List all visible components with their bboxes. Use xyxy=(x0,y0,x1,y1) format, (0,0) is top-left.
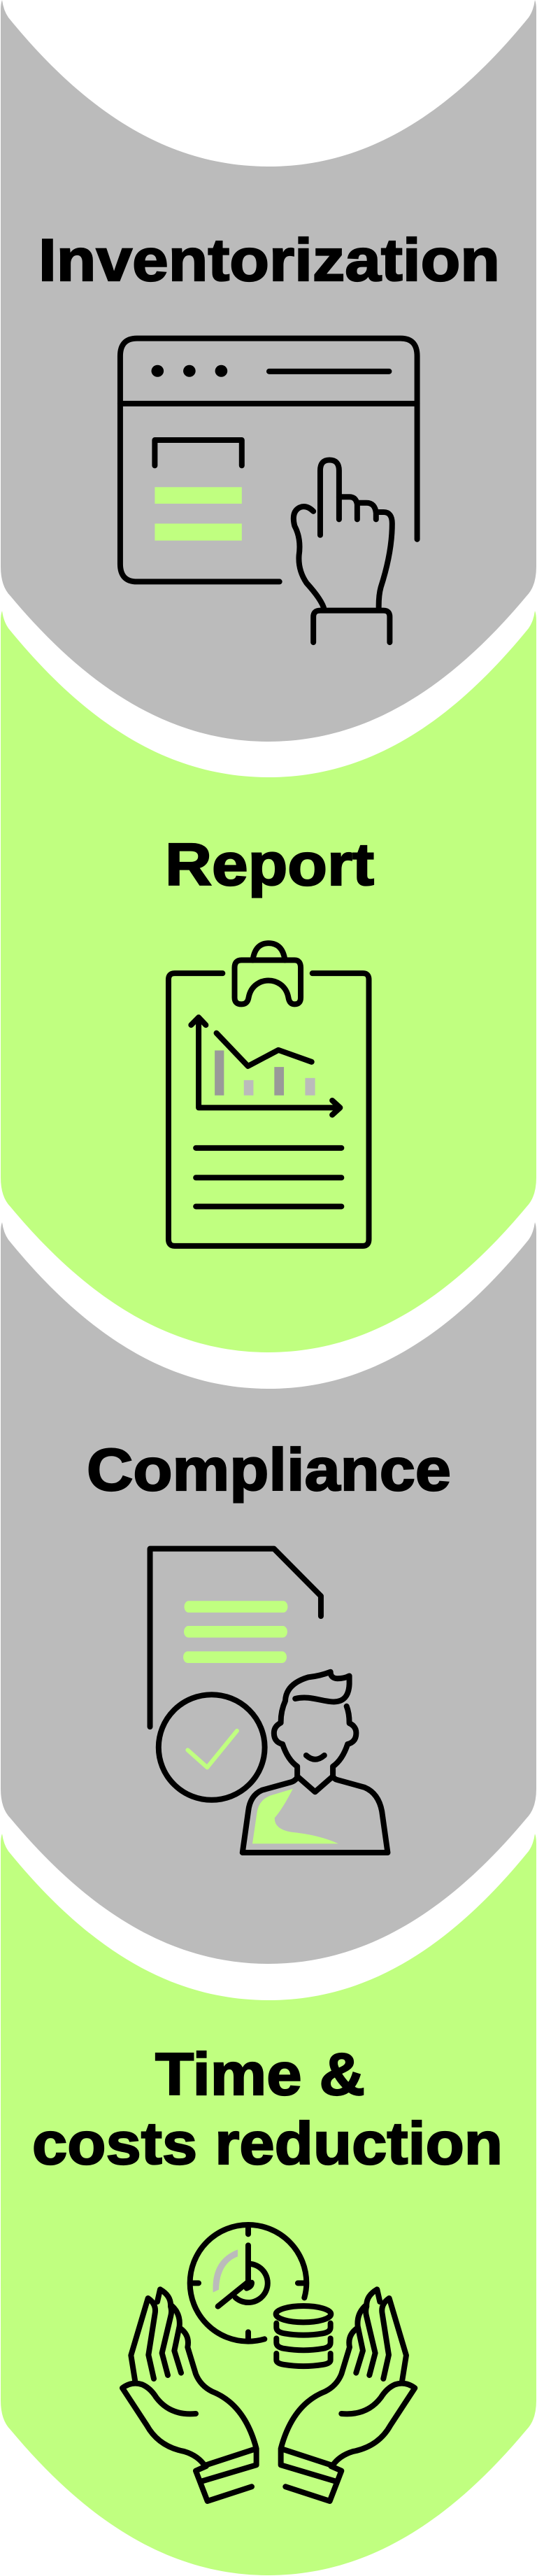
panel: report xyxy=(1,611,536,1352)
icon: browser window with pointing hand xyxy=(120,339,417,642)
heading: Compliance: Compliance xyxy=(87,1437,451,1503)
panel background: grey shield xyxy=(1,1222,536,1964)
heading: Time & costs reduction xyxy=(32,2041,503,2177)
heading: Time & costs reduction: costs reduction xyxy=(32,2111,503,2177)
icon: clipboard with chart xyxy=(169,943,369,1246)
heading: Inventorization: Inventorization xyxy=(38,227,500,294)
icon: document with check and person xyxy=(150,1549,387,1853)
panel: time and costs reduction xyxy=(1,1834,536,2575)
panel: compliance xyxy=(1,1222,536,1964)
heading: Time & costs reduction: Time & xyxy=(155,2041,365,2108)
heading: Report: Report xyxy=(165,832,374,898)
panel: inventorization xyxy=(1,0,536,742)
panel background: grey shield xyxy=(1,0,536,742)
panel background: green shield xyxy=(1,1834,536,2575)
icon: hands holding clock and coins xyxy=(122,2225,415,2501)
panel background: green shield xyxy=(1,611,536,1352)
